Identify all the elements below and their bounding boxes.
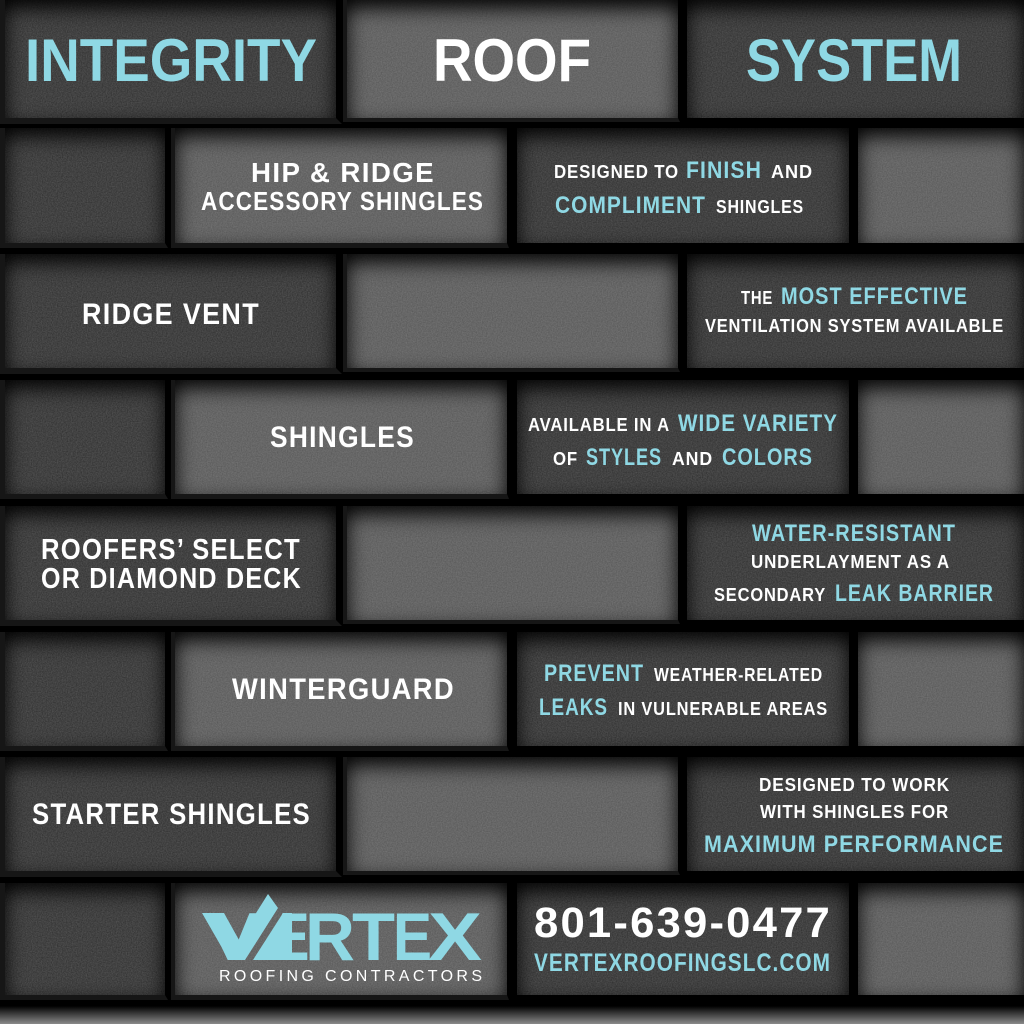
description: wide variety	[517, 380, 849, 494]
description: prevent leaks: LEAKS	[539, 694, 608, 721]
label: hip and ridge	[171, 128, 509, 248]
label: ridge vent	[0, 254, 342, 374]
description: finish and compliment: FINISH	[686, 157, 762, 184]
title word: SYSTEM: SYSTEM	[746, 27, 962, 94]
description: wide variety: AVAILABLE IN A	[528, 415, 670, 435]
description: water resistant: UNDERLAYMENT AS A	[751, 552, 950, 572]
logo tagline: ROOFING CONTRACTORS	[219, 968, 482, 985]
description: maximum performance	[687, 757, 1024, 871]
blank brick	[0, 632, 168, 751]
blank brick	[858, 883, 1024, 995]
website: VERTEXROOFINGSLC.COM	[534, 949, 831, 977]
description: wide variety: WIDE VARIETY	[678, 410, 838, 437]
description: finish and compliment: AND	[771, 162, 813, 182]
description: prevent leaks	[517, 632, 849, 746]
logo: vertex wordmark: E	[279, 899, 309, 975]
description: prevent leaks: WEATHER-RELATED	[654, 665, 823, 685]
label: roofers select or diamond deck: OR DIAMOND DECK	[41, 563, 302, 595]
blank brick	[343, 506, 680, 624]
row 7: starter shingles	[0, 757, 1024, 877]
description: wide variety: AND	[672, 449, 713, 469]
title word: SYSTEM	[687, 0, 1024, 118]
blank brick	[343, 757, 680, 875]
description: wide variety: COLORS	[722, 444, 813, 471]
row 1: title bricks	[0, 0, 1024, 124]
row 2: hip and ridge	[0, 128, 1024, 248]
label: winterguard	[171, 632, 509, 751]
blank brick	[0, 380, 168, 499]
bottom edge glow	[0, 1006, 1024, 1024]
description: maximum performance: DESIGNED TO WORK	[759, 775, 950, 795]
logo: vertex wordmark: T	[352, 899, 395, 975]
title word: INTEGRITY	[0, 0, 342, 124]
description: water resistant: SECONDARY	[714, 585, 826, 605]
logo: vertex wordmark	[202, 894, 482, 975]
label: starter shingles: STARTER SHINGLES	[32, 798, 311, 831]
description: prevent leaks: PREVENT	[544, 660, 644, 687]
label: ridge vent: RIDGE VENT	[82, 298, 260, 331]
description: most effective: MOST EFFECTIVE	[781, 283, 968, 310]
label: starter shingles	[0, 757, 342, 877]
row 8: logo and contact	[0, 883, 1024, 1000]
label: hip and ridge: HIP & RIDGE	[251, 157, 435, 188]
description: finish and compliment: DESIGNED TO	[554, 162, 679, 182]
title word: ROOF	[343, 0, 680, 122]
description: maximum performance: WITH SHINGLES FOR	[760, 802, 949, 822]
row 5: roofers select	[0, 506, 1024, 626]
description: finish and compliment	[517, 128, 849, 243]
label: roofers select or diamond deck	[0, 506, 342, 626]
label: roofers select or diamond deck: ROOFERS’ SELECT	[41, 534, 301, 566]
blank brick	[858, 380, 1024, 494]
row 4: shingles	[0, 380, 1024, 499]
description: most effective: VENTILATION SYSTEM AVAILABLE	[705, 316, 1004, 336]
row 3: ridge vent	[0, 254, 1024, 374]
title word: ROOF: ROOF	[433, 27, 591, 94]
contact brick	[517, 883, 849, 995]
description: finish and compliment: SHINGLES	[716, 197, 804, 217]
blank brick	[858, 128, 1024, 243]
description: finish and compliment: COMPLIMENT	[555, 192, 706, 219]
description: water resistant	[687, 506, 1024, 620]
logo: vertex wordmark: R	[305, 899, 355, 975]
logo: vertex wordmark: V	[205, 899, 263, 975]
description: most effective: THE	[741, 288, 773, 308]
phone number: 801-639-0477	[534, 899, 832, 947]
description: water resistant: WATER-RESISTANT	[752, 520, 956, 547]
blank brick	[0, 883, 168, 1000]
blank brick	[343, 254, 680, 372]
blank brick	[0, 128, 168, 248]
logo brick	[171, 883, 509, 1000]
description: prevent leaks: IN VULNERABLE AREAS	[618, 699, 828, 719]
logo: vertex wordmark: X	[428, 899, 482, 975]
label: shingles: SHINGLES	[270, 421, 415, 454]
blank brick	[858, 632, 1024, 746]
description: wide variety: STYLES	[586, 444, 662, 471]
description: wide variety: OF	[553, 449, 578, 469]
row 6: winterguard	[0, 632, 1024, 751]
label: hip and ridge: ACCESSORY SHINGLES	[201, 186, 484, 216]
title word: INTEGRITY: INTEGRITY	[25, 27, 317, 94]
logo: vertex wordmark: E	[393, 899, 432, 975]
label: shingles	[171, 380, 509, 499]
label: winterguard: WINTERGUARD	[232, 673, 455, 706]
description: most effective	[687, 254, 1024, 368]
